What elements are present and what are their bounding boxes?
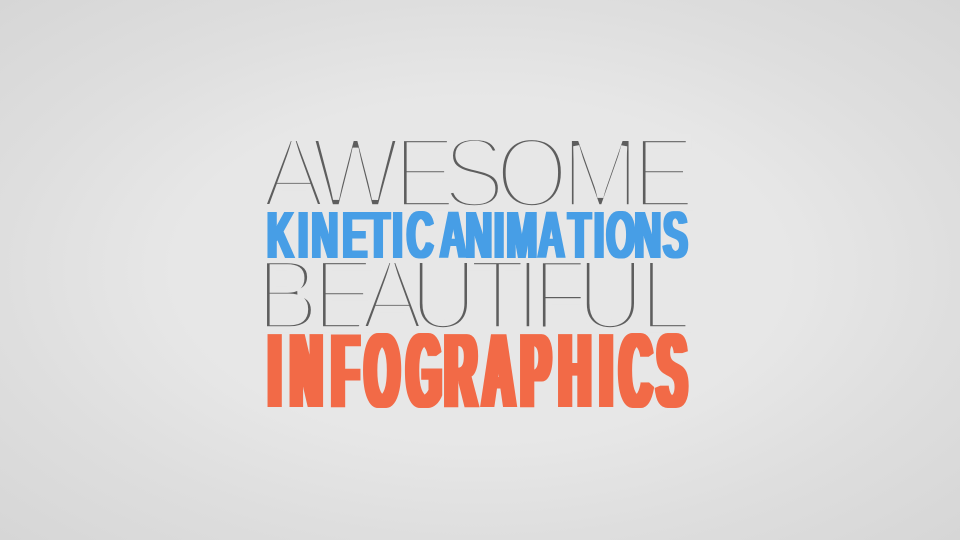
heading line: KINETIC ANIMATIONS: KINETIC ANIMATIONS	[267, 199, 688, 273]
heading line: INFOGRAPHICS: INFOGRAPHICS	[269, 313, 686, 431]
heading line: BEAUTIFUL: BEAUTIFUL	[256, 238, 692, 351]
heading line: AWESOME: AWESOME	[262, 116, 695, 229]
